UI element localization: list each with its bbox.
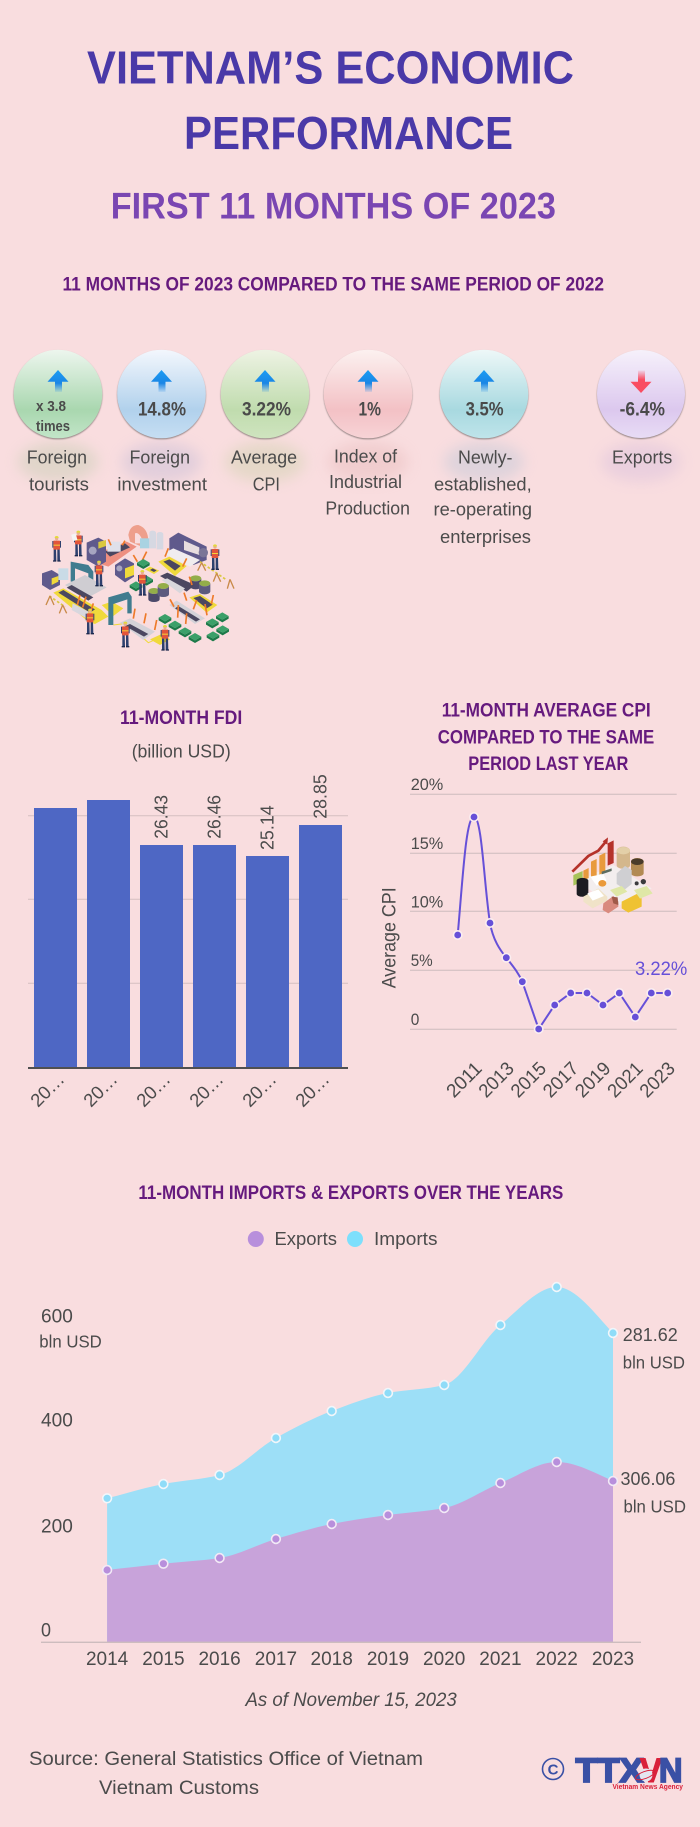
panel: imports and exports area chart — [39, 1182, 686, 1670]
section heading: comparison: 11 MONTHS OF 2023 COMPARED TO THE SAME PERIOD OF 2022 — [62, 273, 604, 295]
panel: FDI bar chart — [26, 707, 348, 1111]
exports data points — [103, 1458, 617, 1574]
title: PERFORMANCE — [184, 107, 513, 159]
y axis labels: bln USD — [39, 1332, 102, 1352]
heading: 11-month average CPI: COMPARED TO THE SAME — [438, 726, 654, 748]
callout: imports 2023: 281.62 — [623, 1324, 678, 1345]
indicator: index of industrial production: 1% — [358, 399, 381, 420]
CPI x axis labels: 2017 — [539, 1058, 583, 1102]
bar value labels: 28.85 — [310, 774, 330, 819]
x axis years: 2016 — [198, 1649, 241, 1670]
x axis years: 2015 — [142, 1649, 185, 1670]
title — [87, 41, 574, 159]
CPI callout value: 3.22% — [635, 959, 687, 980]
heading: 11-month average CPI: 11-MONTH AVERAGE CPI — [442, 700, 651, 722]
bar value labels: 25.14 — [257, 805, 277, 850]
indicator: foreign investment: investment — [117, 473, 207, 494]
indicator: index of industrial production: Industrial — [329, 471, 402, 492]
y axis labels: 5% — [411, 951, 433, 970]
indicator: foreign investment: Foreign — [130, 446, 190, 467]
y axis title: Average CPI — [380, 887, 401, 988]
x axis labels: 20… — [185, 1068, 227, 1111]
x axis labels — [26, 1068, 333, 1111]
unit label: (billion USD) — [132, 740, 231, 761]
indicator: newly-established, re-operating enterprises — [434, 350, 532, 547]
indicator: average CPI: CPI — [253, 473, 280, 494]
legend — [248, 1228, 438, 1249]
x axis labels: 20… — [132, 1068, 174, 1111]
legend: Exports — [274, 1228, 337, 1249]
x axis years: 2020 — [423, 1649, 465, 1670]
x axis labels: 20… — [291, 1068, 333, 1111]
x axis years: 2022 — [536, 1649, 578, 1670]
CPI line — [458, 817, 668, 1029]
indicator: newly-established, re-operating enterprises: enterprises — [440, 526, 531, 547]
y axis labels: 20% — [411, 775, 443, 794]
x axis years: 2019 — [367, 1649, 409, 1670]
CPI data points — [454, 813, 672, 1033]
y axis labels: 15% — [411, 834, 443, 853]
logo: TTXVN Vietnam News Agency — [542, 1752, 684, 1791]
bar value labels — [152, 774, 330, 850]
y axis labels: 600 — [41, 1306, 73, 1327]
indicator: index of industrial production — [324, 350, 412, 518]
source — [29, 1748, 423, 1799]
indicator: foreign investment — [117, 350, 207, 494]
callout: exports 2023: bln USD — [624, 1496, 686, 1516]
x axis years: 2017 — [255, 1649, 297, 1670]
indicator: newly-established, re-operating enterprises: re-operating — [434, 499, 532, 520]
callout: exports 2023 — [620, 1468, 686, 1516]
panel: indicators — [14, 350, 685, 547]
indicator: index of industrial production: Production — [325, 497, 410, 518]
x axis labels: 20… — [238, 1068, 280, 1111]
heading: 11-month average CPI — [438, 700, 654, 775]
indicator: newly-established, re-operating enterprises: 3.5% — [466, 399, 504, 420]
indicator: foreign tourists: x 3.8 — [36, 399, 66, 415]
y axis labels — [411, 775, 443, 1029]
area: imports — [107, 1287, 613, 1642]
indicator: newly-established, re-operating enterprises: Newly- — [458, 446, 512, 467]
CPI x axis labels: 2015 — [507, 1058, 551, 1102]
indicator: foreign tourists: tourists — [29, 473, 89, 494]
heading: 11-month average CPI: PERIOD LAST YEAR — [468, 753, 628, 775]
indicator: foreign tourists — [14, 350, 102, 494]
CPI x axis labels: 2021 — [604, 1058, 648, 1102]
date note: As of November 15, 2023 — [245, 1690, 457, 1711]
logo: TTXVN Vietnam News Agency: N — [659, 1752, 682, 1790]
indicator: foreign tourists: times — [36, 419, 70, 435]
CPI x axis labels — [443, 1058, 680, 1102]
y axis labels: 10% — [411, 892, 443, 911]
source: Vietnam Customs — [99, 1777, 259, 1799]
x axis years: 2023 — [592, 1649, 634, 1670]
indicator: foreign tourists: Foreign — [27, 446, 87, 467]
CPI x axis labels: 2023 — [636, 1058, 680, 1102]
area: exports — [107, 1462, 613, 1642]
callout: imports 2023: bln USD — [623, 1352, 685, 1372]
x axis years: 2021 — [479, 1649, 522, 1670]
indicator: exports: Exports — [612, 446, 672, 467]
CPI x axis labels: 2019 — [571, 1058, 615, 1102]
icon: prices and goods illustration — [572, 837, 653, 913]
x axis years: 2018 — [311, 1649, 353, 1670]
indicator: average CPI: 3.22% — [242, 399, 291, 420]
source: Source: General Statistics Office of Vietnam — [29, 1748, 423, 1770]
indicator: average CPI — [221, 350, 309, 494]
indicator: index of industrial production: Index of — [334, 445, 398, 466]
CPI x axis labels: 2011 — [443, 1058, 487, 1102]
indicator: average CPI: Average — [231, 446, 297, 467]
x axis labels: 20… — [26, 1068, 68, 1111]
subtitle: FIRST 11 MONTHS OF 2023 — [111, 185, 556, 226]
indicator: exports — [597, 350, 685, 482]
callout: imports 2023 — [623, 1324, 685, 1372]
x axis years: 2014 — [86, 1649, 129, 1670]
logo: TTXVN Vietnam News Agency: V — [640, 1752, 662, 1790]
logo: TTXVN Vietnam News Agency: C — [548, 1762, 559, 1778]
y axis labels: 400 — [41, 1411, 73, 1432]
x axis labels: 20… — [79, 1068, 121, 1111]
logo: TTXVN Vietnam News Agency: Vietnam News Agency — [612, 1782, 684, 1791]
legend: Imports — [374, 1228, 438, 1249]
y axis labels: 0 — [411, 1010, 419, 1029]
callout: exports 2023: 306.06 — [620, 1468, 675, 1489]
icon: isometric factory illustration — [42, 525, 234, 651]
title: VIETNAM’S ECONOMIC — [87, 41, 574, 93]
CPI x axis labels: 2013 — [475, 1058, 519, 1102]
bar value labels: 26.46 — [205, 795, 225, 839]
y axis labels: 200 — [41, 1516, 73, 1537]
bars — [34, 800, 342, 1068]
indicator: foreign investment: 14.8% — [138, 399, 186, 420]
y axis labels: 0 — [41, 1621, 51, 1642]
heading: imports and exports: 11-MONTH IMPORTS & EXPORTS OVER THE YEARS — [138, 1182, 563, 1204]
bar value labels: 26.43 — [152, 795, 172, 839]
panel: CPI line chart — [380, 700, 687, 1102]
logo: TTXVN Vietnam News Agency: TTX — [576, 1752, 644, 1790]
x axis years — [86, 1649, 634, 1670]
indicator: newly-established, re-operating enterprises: established, — [434, 473, 532, 494]
indicator: exports: -6.4% — [620, 399, 665, 420]
y axis labels — [39, 1306, 102, 1642]
imports data points — [103, 1283, 617, 1503]
heading: 11-month FDI: 11-MONTH FDI — [120, 707, 242, 729]
